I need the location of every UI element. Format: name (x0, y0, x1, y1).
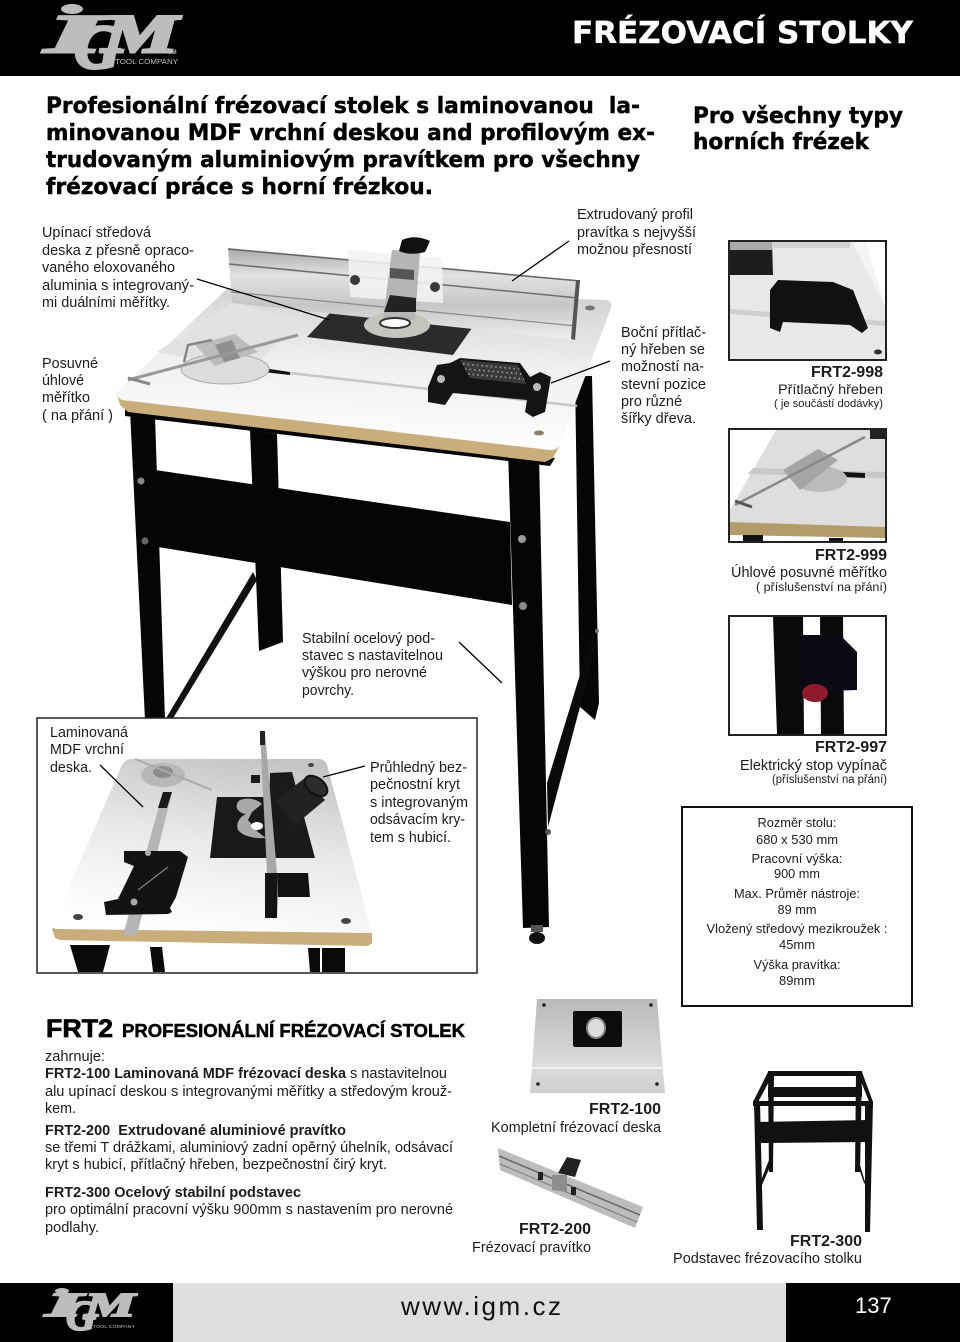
label: laminated top (50, 725, 143, 807)
callout: steel stand: Stabilní ocelový pod- (302, 631, 435, 647)
description text: zahrnuje: (45, 1049, 105, 1065)
inset table top (52, 759, 372, 933)
label: safety guard: Průhledný bez- (370, 760, 467, 776)
router bit ring (364, 312, 430, 338)
description text: se třemi T drážkami, aluminiový zadní opěrný úhelník, odsávací (45, 1140, 453, 1156)
label: FRT2-300: Podstavec frézovacího stolku (673, 1251, 862, 1267)
front right leg (508, 450, 549, 928)
description text: pro optimální pracovní výšku 900mm s nastavením pro nerovné (45, 1202, 453, 1218)
label: FRT2-999: FRT2-999 (815, 547, 887, 564)
callout: extruded fence: pravítka s nejvyšší (577, 225, 696, 241)
footer logo: I (43, 1287, 87, 1324)
inset track (123, 792, 172, 935)
inset lower plate (278, 873, 310, 897)
specification box: 45mm (779, 937, 815, 952)
back left leg (250, 430, 283, 651)
bottom heading (46, 1015, 465, 1043)
safety guard (348, 250, 443, 303)
callout: miter gauge: ( na přání ) (42, 408, 113, 424)
footer logo: TOOL COMPANY (93, 1324, 135, 1329)
callout: steel stand: povrchy. (302, 683, 354, 699)
label: FRT2-300: FRT2-300 (790, 1233, 862, 1250)
callout: clamping plate: vaného eloxovaného (42, 260, 175, 276)
logo: IGM: TM (168, 50, 177, 56)
specification box: 900 mm (774, 866, 820, 881)
label: safety guard: s integrovaným (370, 795, 468, 811)
specification box: Max. Průměr nástroje: (734, 886, 860, 901)
callout: steel stand (302, 631, 502, 699)
logo: IGM: M (101, 4, 181, 64)
label: laminated top: MDF vrchní (50, 742, 124, 758)
back right leg (575, 376, 599, 720)
label: FRT2-200: Frézovací pravítko (472, 1240, 591, 1256)
leveling foot (529, 925, 545, 944)
specification box: 89mm (779, 973, 815, 988)
specification box: Rozměr stolu: (758, 815, 836, 830)
label: FRT2-998 (774, 364, 883, 410)
main router table photo (117, 237, 611, 944)
logo: IGM: TOOL COMPANY (115, 59, 178, 66)
under-table rail (125, 408, 555, 466)
callout: feather board: Boční přítlač- (621, 325, 706, 341)
description text: podlahy. (45, 1220, 99, 1236)
callout: feather board: možností na- (621, 359, 704, 375)
right brace (547, 632, 597, 827)
label: FRT2-997 (740, 739, 887, 786)
label: FRT2-997: (příslušenství na přání) (772, 774, 887, 786)
bottom heading: PROFESIONÁLNÍ FRÉZOVACÍ STOLEK (122, 1020, 465, 1041)
label: FRT2-100 (491, 1101, 662, 1136)
footer (0, 1283, 960, 1342)
side heading: Pro všechny typy (693, 104, 903, 129)
main heading: Profesionální frézovací stolek s laminovanou la- (46, 94, 640, 119)
label: FRT2-999: ( příslušenství na přání) (756, 582, 887, 594)
inset miter gauge (135, 759, 212, 790)
label: safety guard (323, 760, 468, 846)
specification box: Vložený středový mezikroužek : (706, 921, 888, 936)
callout: feather board: stevní pozice (621, 377, 706, 393)
label: FRT2-997: Elektrický stop vypínač (740, 758, 887, 774)
description text: FRT2-300 Ocelový stabilní podstavec (45, 1185, 301, 1201)
label: FRT2-998: Přítlačný hřeben (778, 381, 883, 397)
thumbnail: FRT2-999 miter gauge (729, 429, 886, 542)
callout: extruded fence: možnou přesností (577, 242, 692, 258)
description text: FRT2-200 Extrudované aluminiové pravítko (45, 1123, 346, 1139)
label: laminated top: Laminovaná (50, 725, 129, 741)
footer logo: M (83, 1287, 138, 1324)
main heading: trudovaným aluminiovým pravítkem pro všechny (46, 148, 640, 173)
label: FRT2-998: ( je součástí dodávky) (774, 398, 883, 410)
label: FRT2-999: Úhlové posuvné měřítko (731, 564, 887, 581)
fence (228, 248, 580, 340)
label: FRT2-999 (731, 547, 887, 594)
miter gauge (128, 334, 298, 384)
label: FRT2-300 (673, 1233, 862, 1267)
description text: kryt s hubicí, přítlačný hřeben, bezpečnostní čirý kryt. (45, 1157, 387, 1173)
callout: miter gauge: Posuvné (42, 356, 98, 372)
label: FRT2-200 (472, 1221, 591, 1256)
mounting holes (534, 306, 595, 436)
callout: clamping plate: Upínací středová (42, 225, 152, 241)
description text: kem. (45, 1101, 76, 1117)
inset plate (210, 797, 268, 858)
track (290, 373, 577, 406)
inset holes (73, 763, 351, 924)
footer logo (43, 1287, 138, 1340)
callout: feather board: ný hřeben se (621, 342, 705, 358)
label: FRT2-200: FRT2-200 (519, 1221, 591, 1238)
callout: feather board: pro různé (621, 394, 682, 410)
left brace (165, 572, 257, 720)
inset feather board (104, 850, 188, 915)
callout: extruded fence (512, 207, 696, 281)
page title: FRÉZOVACÍ STOLKY (572, 15, 914, 51)
label: FRT2-997: FRT2-997 (815, 739, 887, 756)
table edge (117, 395, 559, 462)
specification box: 89 mm (778, 902, 816, 917)
callout: miter gauge (42, 356, 113, 424)
specification box: Výška pravítka: (754, 957, 840, 972)
product: FRT2-200 fence (498, 1148, 643, 1228)
center plate (307, 313, 472, 355)
callout: miter gauge: měřítko (42, 390, 90, 406)
product: FRT2-300 stand (753, 1071, 873, 1232)
callout: steel stand: stavec s nastavitelnou (302, 648, 443, 664)
callout: clamping plate: deska z přesně opraco- (42, 243, 194, 259)
footer logo: G (66, 1294, 96, 1340)
label: FRT2-100: FRT2-100 (589, 1101, 661, 1118)
label: FRT2-100: Kompletní frézovací deska (491, 1120, 662, 1136)
description text: FRT2-100 Laminovaná MDF frézovací deska (45, 1066, 347, 1082)
callout: clamping plate: aluminia s integrovaný- (42, 278, 194, 294)
side heading: horních frézek (693, 130, 870, 155)
callout: extruded fence: Extrudovaný profil (577, 207, 693, 223)
description text: s nastavitelnou (350, 1066, 447, 1082)
inset fence (251, 731, 278, 918)
logo: IGM (43, 4, 181, 82)
inset table edge (52, 928, 372, 946)
inset dust port (276, 772, 331, 825)
cross bar (138, 470, 551, 835)
callout: feather board (551, 325, 706, 427)
header bar (0, 0, 960, 82)
callout: clamping plate: mi duálními měřítky. (42, 295, 170, 311)
specification box (682, 807, 912, 1006)
specification box: Pracovní výška: (752, 851, 842, 866)
product: FRT2-100 plate (530, 999, 665, 1093)
inset panel: table top view (37, 718, 477, 973)
thumbnail: FRT2-998 feather board (729, 241, 886, 360)
main heading (46, 94, 655, 200)
label: safety guard: odsávacím kry- (370, 812, 465, 828)
bottom heading: FRT2 (46, 1015, 113, 1043)
logo: IGM: G (74, 14, 120, 82)
callout: clamping plate (42, 225, 330, 320)
description text (45, 1049, 453, 1236)
inset ring (237, 799, 266, 838)
callout: feather board: šířky dřeva. (621, 411, 696, 427)
label: laminated top: deska. (50, 760, 92, 776)
callout: steel stand: výškou pro nerovné (302, 665, 427, 681)
specification box: 680 x 530 mm (756, 832, 838, 847)
side heading (693, 104, 903, 155)
thumbnail: FRT2-997 stop switch (729, 616, 886, 735)
inset legs (70, 945, 345, 972)
label: safety guard: tem s hubicí. (370, 830, 451, 846)
front left leg (130, 410, 165, 720)
feather board (428, 358, 551, 417)
dust port column (380, 237, 430, 328)
left channel step (157, 302, 300, 370)
label: safety guard: pečnostní kryt (370, 777, 460, 793)
table top (117, 288, 611, 450)
callout: miter gauge: úhlové (42, 373, 84, 389)
logo: IGM: I (43, 4, 109, 64)
website: www.igm.cz (400, 1291, 561, 1321)
label: FRT2-998: FRT2-998 (811, 364, 883, 381)
main heading: minovanou MDF vrchní deskou and profilovým ex- (46, 121, 655, 146)
main heading: frézovací práce s horní frézkou. (46, 175, 433, 200)
description text: alu upínací deskou s integrovanými měřítky a středovým krouž- (45, 1084, 452, 1100)
page number: 137 (855, 1293, 892, 1318)
